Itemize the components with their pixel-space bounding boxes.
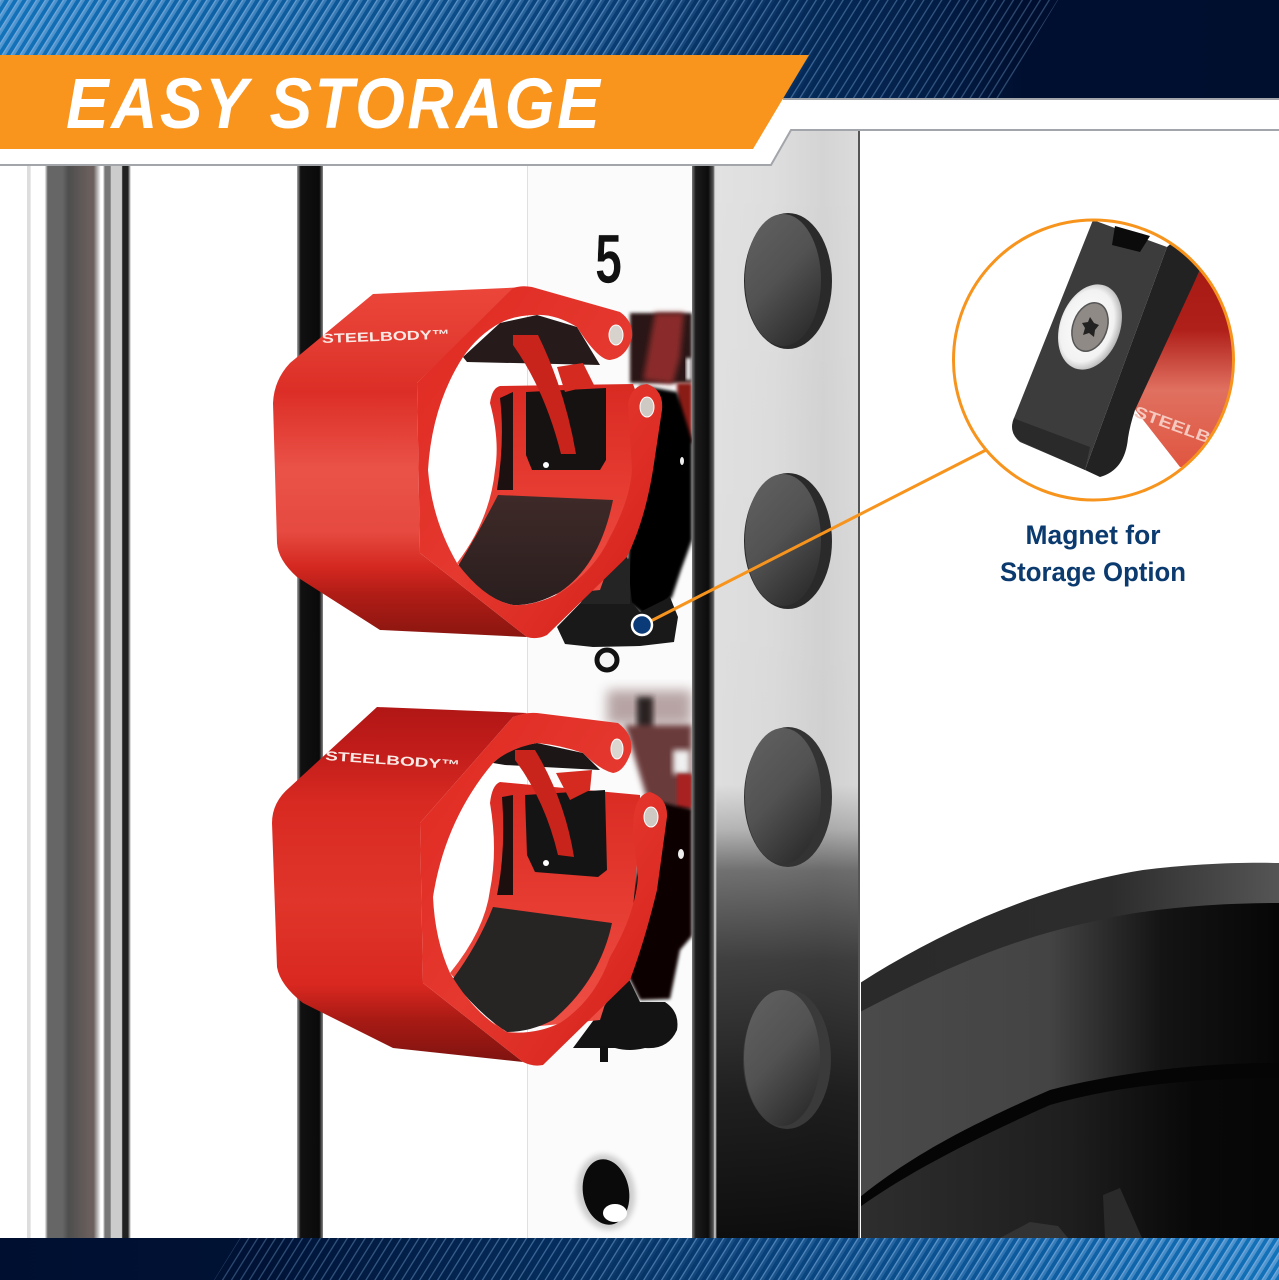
lower clamp mount [573, 690, 692, 1062]
centre panel seam [527, 165, 528, 1240]
upper clamp latch opening [497, 335, 606, 490]
upper clamp bracket plate [457, 384, 640, 600]
black vertical strip [297, 165, 323, 1240]
title: EASY STORAGE [66, 65, 602, 144]
left chrome rail [27, 165, 131, 1240]
upper clamp front ring [417, 286, 662, 638]
weight plate [860, 863, 1279, 1240]
upper clamp rubber pad [458, 495, 613, 605]
lower red clamp [272, 707, 667, 1066]
lower slot hole [571, 1150, 641, 1234]
upper red clamp [273, 286, 662, 638]
magnet washer in detail [1058, 284, 1122, 370]
callout caption: Magnet for [1026, 520, 1161, 550]
upper clamp top shadow [463, 315, 600, 365]
callout caption: Storage Option [1000, 557, 1186, 587]
callout leader line [643, 450, 986, 625]
steel upright post [692, 130, 860, 1240]
top banner background [0, 0, 1279, 99]
lower clamp body [272, 707, 527, 1062]
header band outline [0, 99, 1279, 165]
number 5 marking: 5 [595, 220, 622, 298]
lower clamp bracket plate [450, 782, 640, 1030]
upper clamp hinge pins [609, 325, 654, 417]
callout marker dot [632, 615, 652, 635]
bottom banner [0, 1238, 1279, 1280]
red clamp in detail [1135, 271, 1232, 468]
upper clamp body [273, 287, 527, 637]
lower clamp rubber pad [452, 907, 612, 1032]
lower clamp top shadow [493, 743, 600, 770]
lower clamp latch opening [497, 750, 607, 895]
callout caption [1000, 520, 1186, 587]
lower clamp brand mark: STEELBODY™ [325, 748, 461, 772]
post holes [743, 213, 832, 1129]
callout magnet detail circle [954, 220, 1240, 500]
slot in detail [1112, 226, 1150, 252]
orange title banner [0, 55, 809, 149]
lower clamp hinge pins [611, 739, 658, 827]
brand text in detail: STEELB [1132, 404, 1213, 447]
white header band [0, 99, 1279, 165]
screw in detail [1071, 302, 1109, 352]
upper clamp brand mark: STEELBODY™ [322, 327, 450, 346]
lower clamp front ring [420, 713, 667, 1066]
bracket side in detail [1085, 240, 1200, 477]
bracket face in detail [1012, 220, 1167, 470]
upper clamp mount [557, 313, 692, 670]
